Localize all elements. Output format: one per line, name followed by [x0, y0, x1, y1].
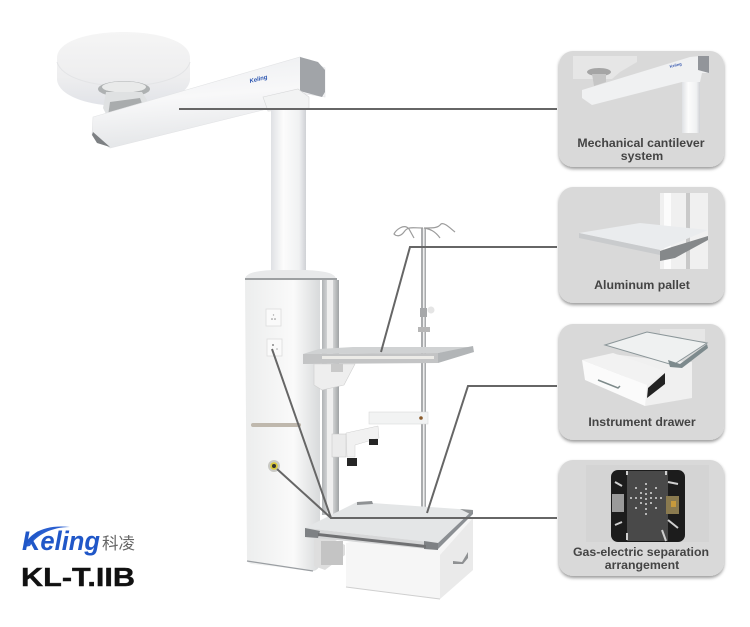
thumbnail: drawer: [582, 329, 708, 406]
panel: gas-electric separation arrangement: arrangement: [605, 558, 679, 572]
model name: KL-T.IIB: [21, 562, 135, 592]
gas outlet: [268, 460, 280, 472]
panel: gas-electric separation arrangement: [559, 460, 724, 576]
panel: mechanical cantilever system: system: [621, 149, 663, 163]
caption: Aluminum pallet: [594, 278, 690, 292]
caption: Instrument drawer: [588, 415, 696, 429]
brand logo: Keling: [22, 526, 100, 556]
caption: Gas-electric separation: [573, 545, 709, 559]
panel: aluminum pallet: [559, 187, 724, 303]
thumbnail: cantilever: [573, 56, 709, 133]
ceiling disk: [57, 32, 190, 118]
leader lines: [179, 109, 557, 518]
wall socket 1: [266, 309, 281, 326]
caption: Mechanical cantilever: [577, 136, 705, 150]
thumbnail: gas-electric box: [586, 465, 709, 542]
panel: instrument drawer: [559, 324, 724, 440]
wall socket 2: [267, 339, 282, 356]
service housing: [245, 270, 339, 571]
upper tray: [303, 346, 474, 390]
arm logo: Keling: [249, 75, 269, 85]
thumbnail: cantilever: Keling: [669, 61, 683, 69]
panel: mechanical cantilever system: [559, 51, 724, 167]
lower tray with drawer: [305, 501, 473, 599]
rotating arm: [92, 57, 325, 148]
support arm: [332, 412, 428, 466]
thumbnail: pallet: [579, 193, 708, 269]
brand logo: 科凌: [102, 534, 135, 553]
pendant product illustration: [57, 32, 474, 599]
infusion pole with hooks: [394, 224, 455, 513]
vertical column: [271, 110, 306, 270]
